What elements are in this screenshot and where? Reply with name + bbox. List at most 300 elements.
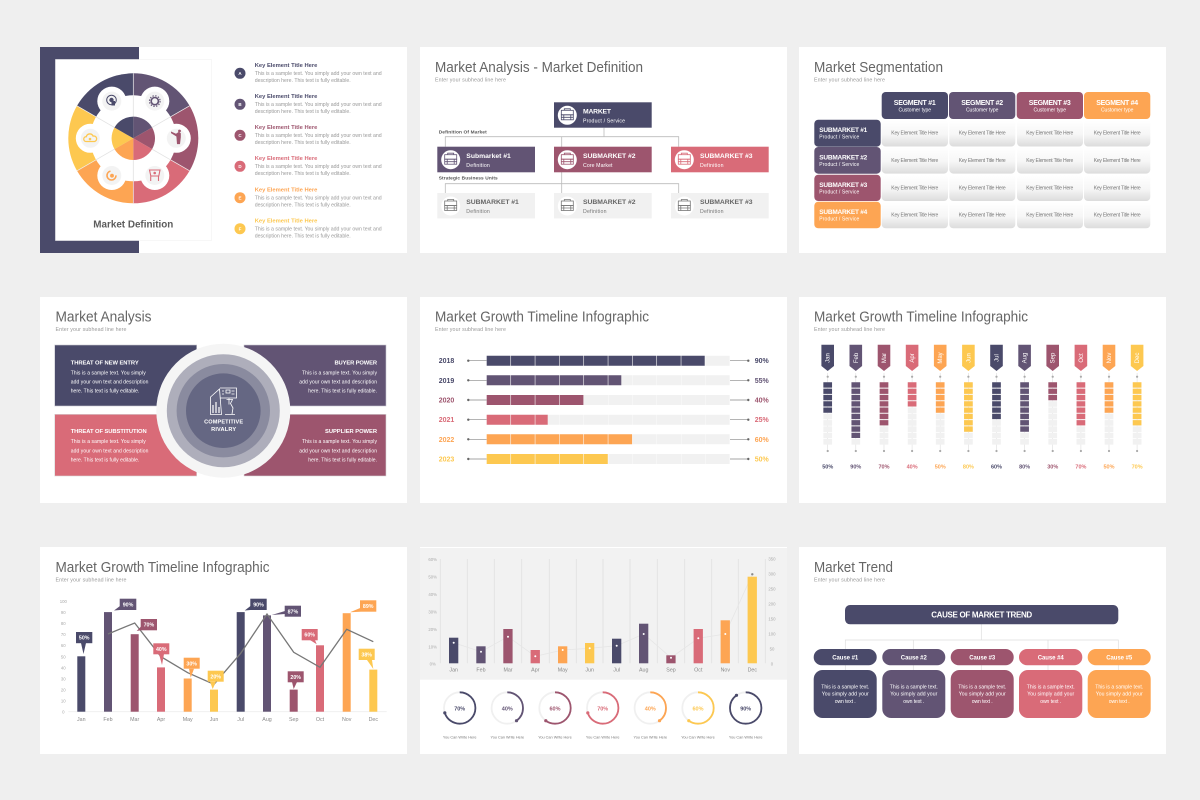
y axis labels: 20 [61, 688, 66, 692]
left axis labels [428, 557, 437, 666]
list item E: description here. This text is fully editable. [255, 202, 351, 208]
month labels: Sep [289, 717, 298, 723]
row header 1 [814, 120, 881, 147]
callout Apr [153, 643, 169, 665]
ring 60% yellow: You Can Write Here [681, 735, 715, 739]
box: submarket 1 [437, 147, 535, 172]
cause 5: own text . [1109, 699, 1130, 705]
box: unit 2: Definition [583, 209, 607, 215]
column Sep: 30% [1047, 465, 1058, 471]
list item B: description here. This text is fully editable. [255, 109, 351, 115]
column Jul: Jul [994, 354, 1000, 362]
column Nov: Nov [1107, 353, 1113, 363]
month labels: Mar [503, 668, 513, 674]
navy side band [40, 47, 139, 253]
icon: cloud [81, 129, 100, 148]
panel: combo chart with progress rings [420, 547, 787, 754]
right axis labels: 300 [768, 572, 776, 576]
cause 1: You simply add your [822, 692, 869, 698]
segment header 2: SEGMENT #2 [961, 100, 1003, 107]
column May: May [938, 352, 944, 364]
ring 60% wine: You Can Write Here [538, 735, 572, 739]
row header 3: SUBMARKET #3 [819, 182, 868, 189]
column Feb: Feb [854, 352, 860, 363]
ring 40%: 40% [502, 706, 513, 712]
ring 60% wine [538, 692, 572, 739]
box: unit 2 [554, 193, 652, 218]
table cells: Key Element Title Here [1026, 185, 1074, 191]
right axis labels: 350 [768, 556, 776, 562]
panel background [799, 297, 1166, 503]
panel: market trend causes [799, 547, 1166, 754]
cause 5 [1088, 649, 1151, 718]
card: buyer power: here. This text is fully editable. [308, 389, 377, 395]
row 2019 [439, 378, 769, 385]
left axis labels: 50% [428, 574, 437, 580]
box: submarket 3: Definition [700, 163, 724, 169]
column Feb [850, 345, 862, 471]
row 2021: 25% [755, 417, 769, 424]
segment header 2 [949, 92, 1015, 119]
y axis labels: 40 [61, 666, 66, 670]
right axis labels: 0 [771, 662, 774, 666]
panel background [799, 547, 1166, 754]
row 2023 [439, 456, 769, 464]
month labels: Jan [449, 668, 458, 674]
row 2019: 55% [755, 378, 769, 385]
table cells: Key Element Title Here [891, 131, 939, 137]
row 2019: 2019 [439, 378, 454, 385]
box: unit 1: SUBMARKET #1 [466, 199, 519, 206]
callout Mar [137, 619, 157, 631]
cause 2: This is a sample text. [890, 684, 938, 690]
subhead: Enter your subhead line here [814, 327, 885, 333]
icon: market report [210, 388, 236, 414]
column Mar: Mar [882, 353, 888, 363]
row header 2: Product / Service [819, 162, 860, 168]
callout Jan [76, 632, 92, 654]
column Jul: 60% [991, 465, 1002, 471]
cause 2: own text . [903, 699, 924, 705]
cause 4: own text . [1040, 699, 1061, 705]
list item B: B [238, 102, 242, 107]
callout Nov: 89% [363, 604, 374, 610]
bars [77, 612, 377, 712]
heading: Market Analysis - Market Definition [435, 59, 643, 76]
cause 4: This is a sample text. [1027, 684, 1075, 690]
table cells: Key Element Title Here [1094, 158, 1141, 164]
list item A: description here. This text is fully editable. [255, 78, 351, 84]
box: submarket 2: SUBMARKET #2 [583, 153, 636, 160]
box: unit 3: Definition [700, 209, 724, 215]
column Apr: 40% [907, 465, 918, 471]
cause 3: Cause #3 [969, 655, 996, 661]
card: threat of substitution [55, 414, 197, 476]
trend line [108, 614, 373, 684]
icon: gear [145, 92, 164, 111]
column May [934, 345, 946, 471]
cause 3 [951, 649, 1014, 718]
table cells: Key Element Title Here [959, 213, 1006, 219]
month labels: Feb [103, 717, 113, 723]
column May: 50% [935, 465, 946, 471]
segment header 4: SEGMENT #4 [1096, 100, 1138, 107]
list item F: This is a sample text. You simply add your own text and [255, 226, 382, 232]
column Mar: 70% [878, 465, 890, 471]
top banner [845, 605, 1118, 624]
column Jun: Jun [966, 353, 972, 363]
row 2018: 2018 [439, 358, 454, 365]
y axis labels [60, 599, 67, 714]
list item F: Key Element Title Here [255, 218, 318, 224]
panel background [40, 297, 407, 503]
callout Jun: 20% [210, 674, 221, 680]
table cells: Key Element Title Here [1026, 131, 1074, 137]
ring 60% yellow: 60% [692, 706, 704, 712]
callout Dec [359, 649, 375, 669]
segment header 3: SEGMENT #3 [1029, 100, 1071, 107]
month labels: Jan [77, 717, 86, 723]
cause 2: You simply add your [890, 692, 938, 698]
column Nov [1103, 345, 1115, 471]
month labels: Jul [237, 717, 244, 723]
cause 3: This is a sample text. [958, 684, 1006, 690]
callout Sep [288, 671, 304, 689]
card: buyer power: BUYER POWER [334, 360, 378, 366]
card: buyer power [244, 345, 386, 406]
ring 40%: You Can Write Here [491, 735, 524, 739]
month labels: Apr [157, 717, 165, 723]
box: submarket 1: Definition [466, 163, 490, 169]
cause 1 [814, 649, 877, 718]
hub: competitive rivalry rings [156, 344, 290, 478]
column Aug [1018, 345, 1031, 471]
cause 1: Cause #1 [832, 655, 859, 661]
month labels: Aug [639, 668, 648, 674]
heading: Market Trend [814, 559, 893, 576]
table cells: Key Element Title Here [1094, 131, 1141, 137]
row header 3 [814, 175, 881, 201]
month labels: Oct [694, 668, 703, 674]
ring 70% [443, 692, 476, 739]
left axis labels: 40% [428, 592, 437, 597]
column Aug: Aug [1023, 353, 1029, 363]
right axis labels: 50 [770, 646, 775, 652]
box: market: MARKET [583, 108, 612, 115]
cause 4: Cause #4 [1038, 655, 1064, 661]
row 2020 [439, 398, 769, 404]
row header 1: SUBMARKET #1 [819, 127, 868, 134]
month labels: May [558, 668, 568, 674]
ring 90% [729, 692, 762, 739]
icon: presenter [167, 129, 186, 148]
month labels: Mar [130, 717, 139, 723]
list item F [234, 218, 382, 239]
column Oct: 70% [1075, 465, 1087, 471]
month labels: Nov [721, 668, 730, 674]
six-segment wheel [68, 73, 198, 203]
row header 4: SUBMARKET #4 [819, 209, 868, 216]
panel background [420, 297, 787, 503]
table cells: Key Element Title Here [891, 213, 939, 219]
left axis labels: 20% [428, 627, 437, 632]
card: threat of new entry: add your own text and description [71, 380, 149, 386]
box: market [554, 102, 652, 128]
icon: podium [145, 166, 164, 185]
list item F: description here. This text is fully editable. [255, 233, 351, 239]
callout Dec: 38% [361, 652, 372, 658]
y axis labels: 10 [61, 698, 66, 704]
subhead: Enter your subhead line here [814, 578, 885, 584]
table cells: Key Element Title Here [959, 158, 1006, 164]
y axis labels: 90 [61, 610, 66, 615]
y axis labels: 0 [62, 710, 65, 714]
callout Nov [350, 600, 376, 612]
ring 60% wine: 60% [549, 706, 561, 712]
ring 90%: 90% [740, 706, 751, 712]
card: threat of new entry: THREAT OF NEW ENTRY [71, 360, 139, 366]
card: supplier power: here. This text is fully editable. [308, 457, 377, 463]
heading: Market Growth Timeline Infographic [56, 559, 270, 576]
connector lines [845, 624, 1118, 670]
cause 2: Cause #2 [901, 655, 927, 661]
row 2021: 2021 [439, 417, 454, 424]
trend line [454, 574, 752, 658]
row header 2 [814, 147, 881, 174]
column Jul [990, 345, 1003, 471]
column Dec: Dec [1135, 353, 1141, 363]
column Jun [962, 345, 975, 471]
segment header 3 [1017, 92, 1083, 119]
column Dec [1131, 345, 1143, 471]
month labels: Jun [585, 668, 594, 674]
subhead: Enter your subhead line here [435, 78, 506, 84]
box: market: Product / Service [583, 118, 625, 124]
cause 5: This is a sample text. [1095, 684, 1143, 690]
card: threat of new entry: This is a sample text. You simply [71, 370, 146, 376]
subhead: Enter your subhead line here [56, 327, 127, 333]
callout Aug [272, 606, 301, 617]
column Oct: Oct [1079, 353, 1085, 363]
column Feb: 90% [850, 465, 861, 471]
ring 70% rose: You Can Write Here [586, 735, 619, 739]
cause 5: Cause #5 [1106, 655, 1133, 661]
panel: growth timeline horizontal bars [420, 297, 787, 503]
column Jun: 80% [963, 465, 974, 471]
y axis labels: 80 [61, 621, 66, 626]
cause 4: You simply add your [1027, 692, 1074, 698]
right axis labels: 150 [768, 616, 776, 622]
y axis labels: 70 [61, 632, 66, 637]
table cells: Key Element Title Here [891, 158, 939, 164]
row 2018 [439, 358, 769, 365]
connector lines [445, 128, 679, 193]
ring 60% yellow [681, 692, 715, 739]
ring 70% rose: 70% [597, 706, 608, 712]
table cells: Key Element Title Here [1094, 185, 1141, 191]
column Apr [906, 345, 918, 471]
table cells: Key Element Title Here [1026, 213, 1074, 219]
cause 4 [1019, 649, 1082, 718]
icon: pie chart [102, 166, 121, 185]
card: supplier power: This is a sample text. You simply [302, 439, 378, 445]
segment header 1: SEGMENT #1 [894, 100, 936, 107]
heading: Market Growth Timeline Infographic [814, 308, 1028, 326]
list item A: This is a sample text. You simply add your own text and [255, 71, 382, 77]
callout Oct: 60% [304, 633, 315, 639]
right axis labels: 200 [768, 602, 776, 606]
list item A: A [238, 71, 242, 76]
row 2020: 2020 [439, 398, 454, 404]
box: submarket 3 [671, 147, 769, 172]
ring 40% orange [634, 692, 667, 739]
column Apr: Apr [910, 353, 916, 363]
list item A [234, 63, 382, 84]
ring 70%: 70% [454, 706, 465, 712]
row 2018: 90% [755, 358, 769, 365]
label: strategic business units: Strategic Business Units [439, 176, 498, 182]
month labels: Apr [531, 668, 540, 674]
hub text: COMPETITIVE [204, 420, 243, 426]
y axis labels: 30 [61, 676, 66, 682]
callout Oct [302, 629, 318, 644]
ring 40% orange: You Can Write Here [634, 735, 667, 739]
ring 90%: You Can Write Here [729, 735, 762, 739]
card: supplier power [244, 414, 386, 476]
panel: growth timeline monthly columns [799, 297, 1166, 503]
row 2022: 2022 [439, 437, 454, 444]
list item B: This is a sample text. You simply add your own text and [255, 102, 382, 108]
row 2022: 60% [755, 437, 769, 444]
month labels: Jun [210, 717, 218, 723]
callout May: 30% [186, 661, 197, 667]
row header 2: SUBMARKET #2 [819, 154, 868, 162]
row header 4: Product / Service [819, 216, 860, 222]
card: threat of substitution: add your own text and description [71, 448, 149, 454]
list item B: Key Element Title Here [255, 94, 318, 100]
right axis labels [768, 556, 776, 666]
table cells: Key Element Title Here [959, 185, 1006, 191]
callout Jun [208, 671, 224, 689]
wheel title: Market Definition [93, 220, 173, 230]
month labels [77, 717, 378, 723]
table cells: Key Element Title Here [891, 185, 939, 191]
card: supplier power: SUPPLIER POWER [325, 429, 378, 435]
panel: market segmentation table [799, 47, 1166, 253]
box: unit 3: SUBMARKET #3 [700, 199, 753, 206]
month labels: Aug [262, 717, 272, 723]
ring 40% [491, 692, 524, 739]
heading: Market Analysis [56, 308, 152, 326]
month labels: Nov [342, 717, 352, 723]
hub: competitive rivalry rings: RIVALRY [211, 427, 236, 433]
top banner: CAUSE OF MARKET TREND [931, 610, 1032, 620]
heading: Market Segmentation [814, 59, 943, 76]
segment header 4 [1084, 92, 1150, 119]
segment header 4: Customer type [1101, 108, 1134, 114]
cause 3: own text . [972, 699, 993, 705]
list item C: C [238, 133, 242, 138]
column Jan: 50% [822, 465, 833, 471]
column Dec: 70% [1132, 465, 1143, 471]
white wheel card [56, 60, 212, 240]
list item D: Key Element Title Here [255, 156, 318, 162]
callout Sep: 20% [290, 675, 301, 681]
list item E [234, 187, 382, 208]
callout Feb: 90% [123, 602, 134, 608]
list item F: F [239, 226, 242, 231]
segment header 1: Customer type [899, 108, 931, 114]
chart background [420, 548, 787, 680]
heading: Market Growth Timeline Infographic [435, 308, 649, 326]
card: supplier power: add your own text and description [299, 448, 377, 454]
panel: market definition org chart [420, 47, 787, 253]
column Jan: Jan [826, 353, 832, 363]
card: buyer power: add your own text and description [299, 380, 377, 386]
row 2020: 40% [755, 398, 769, 404]
cause 2 [882, 649, 945, 718]
subhead: Enter your subhead line here [814, 78, 885, 84]
list item D: D [238, 164, 242, 169]
list item A: Key Element Title Here [255, 63, 318, 69]
ring 70% rose [586, 692, 619, 739]
card: buyer power: This is a sample text. You simply [302, 370, 378, 376]
trend markers [453, 573, 754, 659]
right axis labels: 250 [768, 586, 776, 592]
vertical grid lines [440, 559, 765, 663]
callout Jul [245, 599, 267, 610]
card: threat of substitution: here. This text is fully editable. [71, 457, 139, 463]
month labels: May [183, 717, 193, 723]
table cells: Key Element Title Here [1026, 158, 1074, 164]
list item D: description here. This text is fully editable. [255, 171, 351, 177]
row 2023: 50% [755, 456, 769, 464]
month labels: Oct [316, 717, 325, 723]
box: submarket 2 [554, 147, 652, 172]
left axis labels: 60% [428, 557, 437, 562]
left axis labels: 0% [430, 662, 436, 666]
month labels: Dec [369, 717, 378, 723]
card: threat of substitution: THREAT OF SUBSTITUTION [71, 429, 147, 435]
row 2021 [439, 417, 769, 424]
month labels: Dec [748, 668, 757, 674]
column Oct [1075, 345, 1087, 471]
row header 3: Product / Service [819, 189, 860, 195]
month labels [449, 668, 757, 674]
panel background [40, 547, 407, 754]
list item E: Key Element Title Here [255, 187, 318, 193]
list item C: description here. This text is fully editable. [255, 140, 351, 146]
y axis labels: 100 [60, 599, 67, 604]
box: unit 1 [437, 193, 535, 218]
row header 1: Product / Service [819, 135, 860, 141]
callout Apr: 40% [156, 647, 167, 653]
column Sep [1046, 345, 1059, 471]
column Aug: 80% [1019, 465, 1030, 471]
y axis labels: 60 [61, 643, 66, 648]
panel background [420, 47, 787, 253]
segment header 1 [882, 92, 948, 119]
panel background [420, 547, 787, 754]
ring 70%: You Can Write Here [443, 735, 476, 739]
month labels: Sep [666, 668, 676, 674]
box: unit 1: Definition [466, 209, 490, 215]
card: threat of new entry: here. This text is fully editable. [71, 389, 139, 395]
box: submarket 1: Submarket #1 [466, 153, 511, 160]
callout Jul: 90% [253, 602, 264, 608]
column Nov: 50% [1103, 465, 1115, 471]
label: definition of market: Definition Of Market [439, 129, 487, 135]
